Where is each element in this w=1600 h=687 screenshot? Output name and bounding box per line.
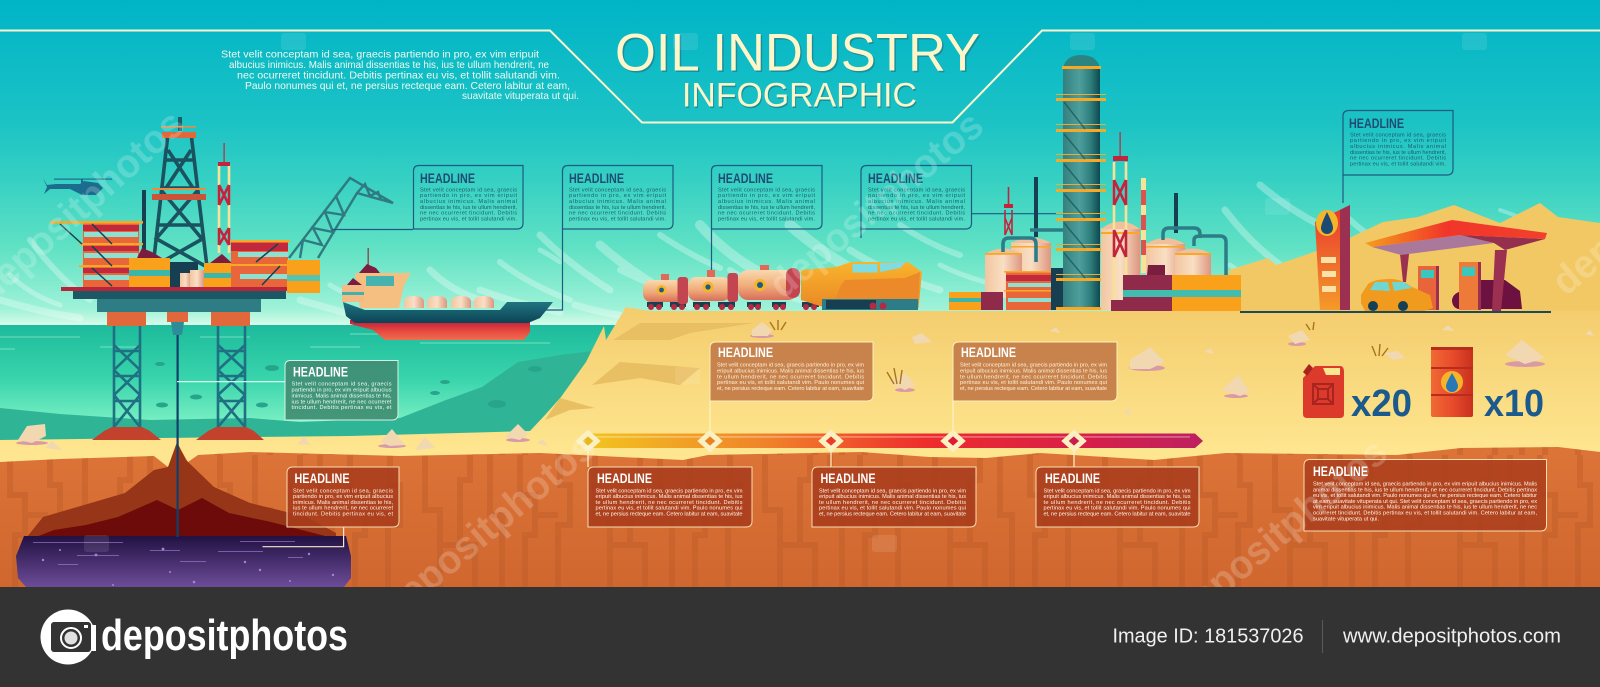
fuel pumps <box>1418 262 1481 310</box>
info box: reservoir: HEADLINE <box>294 470 350 486</box>
info box: rock 3: eripuit albucius inimicus. Malis animal dissentias te his, ius <box>1044 494 1191 500</box>
red mast <box>219 165 229 253</box>
info box: rock 2: et, ne persius recteque eam. Cetero labitur at eam, suavitate <box>819 512 966 518</box>
info box: station: dissentias te his, ius te ullum hendrerit, <box>1350 150 1446 156</box>
title: INFOGRAPHIC <box>683 78 918 116</box>
info box: water: Stet velit conceptam id sea, graecis <box>292 382 392 388</box>
brown dome <box>27 442 336 537</box>
intro text: suavitate vituperata ut qui. <box>462 90 579 102</box>
info box: reservoir <box>287 467 399 527</box>
connector: pipe to water box <box>177 381 285 383</box>
rock shadows <box>16 334 1545 448</box>
canopy top <box>1365 220 1547 247</box>
info box: sand 2: pertinax eu vis, et tollit salutandi vim. Paulo nonumes qui <box>960 380 1107 386</box>
info box: rock wide: animal dissentias te his, ius te ullum hendrerit, ne nec ocurreret tincidunt. Debitis pertinax <box>1313 487 1537 493</box>
sand land <box>0 307 1600 470</box>
orange car <box>1361 279 1433 311</box>
info box: water: partiendo in pro, ex vim eripuit albucius <box>292 388 392 394</box>
tall tank <box>1101 222 1140 310</box>
leg caps <box>107 312 250 326</box>
info box: station: albucius inimicus. Malis animal <box>1350 144 1446 150</box>
info box: top 4: dissentias te his, ius te ullum hendrerit, <box>868 205 965 211</box>
title <box>615 24 982 116</box>
info box: top 1: ne nec ocurreret tincidunt. Debitis <box>420 211 517 217</box>
info box: rock 1 <box>588 467 752 527</box>
info box: top 2: HEADLINE <box>569 170 624 186</box>
sky background <box>0 0 1600 326</box>
info box: reservoir: inimicus. Malis animal dissentias te his, <box>293 500 393 506</box>
info box: sand 1 <box>710 342 873 401</box>
info box: station: ne nec ocurreret tincidunt. Debitis <box>1350 156 1446 162</box>
info box: rock 2: te ullum hendrerit, ne nec ocurreret tincidunt. Debitis <box>819 500 966 506</box>
info box: rock 3: pertinax eu vis, et tollit salutandi vim. Paulo nonumes qui <box>1044 506 1190 512</box>
maroon car <box>1452 280 1522 309</box>
info box: rock wide: suavitate vituperata ut qui. <box>1313 516 1379 522</box>
info box: water <box>285 360 398 420</box>
info box: top 3: Stet velit conceptam id sea, graecis <box>718 187 815 193</box>
title frame <box>0 30 1600 122</box>
info box: top 1: albucius inimicus. Malis animal <box>420 199 517 205</box>
info box: top 3: ne nec ocurreret tincidunt. Debitis <box>718 211 815 217</box>
info box: top 2: partiendo in pro, ex vim eripuit <box>569 193 666 199</box>
milestone diamonds <box>579 433 1083 449</box>
info box: top 4: ne nec ocurreret tincidunt. Debitis <box>868 211 965 217</box>
info box: top 2 <box>562 166 673 229</box>
icon: oil barrel <box>1431 347 1473 417</box>
info box: reservoir: partiendo in pro, ex vim eripuit albucius <box>293 494 393 500</box>
info box: top 1: Stet velit conceptam id sea, graecis <box>420 187 517 193</box>
watermark overlays: depositphotos <box>373 425 604 629</box>
orange module 3 <box>287 260 320 293</box>
canopy underside <box>1372 235 1494 255</box>
wispy clouds <box>0 185 1530 318</box>
intro text: nec ocurreret tincidunt. Debitis pertinax eu vis, et tollit salutandi vim. <box>237 70 560 82</box>
info box: rock 1: et, ne persius recteque eam. Cetero labitur at eam, suavitate <box>596 512 742 518</box>
fish silhouettes <box>155 362 542 408</box>
info box: rock wide: ocurreret tincidunt. Debitis pertinax eu vis, et tollit salutandi vim. Cetero labitur at eam, <box>1313 511 1537 517</box>
superstructure <box>368 248 369 273</box>
intro text: Stet velit conceptam id sea, graecis partiendo in pro, ex vim eripuit <box>221 48 539 60</box>
depositphotos logo: depositphotos <box>101 611 348 660</box>
info box: rock wide: at eam, suavitate vituperata ut qui. Stet velit conceptam id sea, graecis partiendo in pro, ex <box>1313 499 1537 505</box>
tank car 3 <box>738 265 800 300</box>
info box: sand 2: eripuit albucius inimicus. Malis animal dissentias te his, ius <box>960 368 1107 374</box>
info box: rock 1: eripuit albucius inimicus. Malis animal dissentias te his, ius <box>596 494 743 500</box>
sea <box>0 325 620 450</box>
left mast <box>1005 187 1012 235</box>
footer bar <box>0 587 1600 687</box>
info box: rock wide: Stet velit conceptam id sea, graecis partiendo in pro, ex vim eripuit albucius inimicus. Malis <box>1313 481 1537 487</box>
ground line <box>1240 311 1551 313</box>
info box: rock 2: eripuit albucius inimicus. Malis animal dissentias te his, ius <box>819 494 966 500</box>
info box: sand 1: Stet velit conceptam id sea, graecis partiendo in pro, ex vim <box>717 363 864 369</box>
info box: rock 3: HEADLINE <box>1045 470 1100 486</box>
info box: top 4: albucius inimicus. Malis animal <box>868 199 965 205</box>
right tanks <box>1146 238 1211 275</box>
drill pipe <box>176 325 179 537</box>
intro text: Paulo nonumes qui et, ne persius recteque eam. Cetero labitur at eam, <box>245 80 570 92</box>
label: x10: x10 <box>1484 383 1544 425</box>
leg bases <box>92 427 161 440</box>
watermark overlays: depositphotos <box>761 103 992 307</box>
info box: top 2: albucius inimicus. Malis animal <box>569 199 666 205</box>
info box: water: ius te ullum hendrerit, ne nec ocurreret <box>292 399 392 405</box>
info box: rock 1: Stet velit conceptam id sea, graecis partiendo in pro, ex vim <box>596 488 743 494</box>
info box: rock wide: eu vis, et tollit salutandi vim. Paulo nonumes qui et, ne persius recteque eam. Cetero labitur <box>1313 493 1537 499</box>
info box: rock 3 <box>1036 467 1199 527</box>
title: OIL INDUSTRY <box>615 24 980 82</box>
connector lines top <box>332 175 1343 310</box>
info box: rock 1: HEADLINE <box>597 470 652 486</box>
depositphotos logo <box>40 610 348 664</box>
icon: jerrycan <box>1303 364 1344 418</box>
chimney <box>142 190 146 260</box>
info box: top 1: partiendo in pro, ex vim eripuit <box>420 193 517 199</box>
canopy posts <box>1400 250 1507 311</box>
price pylon <box>1315 205 1350 310</box>
info box: top 3: dissentias te his, ius te ullum hendrerit, <box>718 205 815 211</box>
watermark camera marks <box>84 33 1487 552</box>
right pipes <box>1163 228 1226 275</box>
right mast <box>1114 162 1126 300</box>
info box: station: Stet velit conceptam id sea, graecis <box>1350 132 1446 138</box>
intro text: albucius inimicus. Malis animal dissentias te his, ius te ullum hendrerit, ne <box>229 59 549 71</box>
info box: station: HEADLINE <box>1349 115 1404 131</box>
orange plant <box>1111 265 1241 311</box>
timeline bar <box>588 434 1203 448</box>
info box: sand 2: Stet velit conceptam id sea, graecis partiendo in pro, ex vim <box>960 363 1107 369</box>
offshore oil platform <box>43 117 393 440</box>
info box: sand 2: te ullum hendrerit, ne nec ocurreret tincidunt. Debitis <box>960 374 1107 380</box>
info box: top 2: Stet velit conceptam id sea, graecis <box>569 187 666 193</box>
left pipes <box>1003 230 1063 262</box>
watermark overlays: depositphotos <box>1165 430 1396 634</box>
info box: top 3: partiendo in pro, ex vim eripuit <box>718 193 815 199</box>
bogies and wheels <box>647 302 819 307</box>
refinery <box>949 55 1241 311</box>
right building <box>230 240 290 287</box>
info box: rock wide: vim eripuit albucius inimicus. Malis animal dissentias te his, ius te ullum hendrerit, ne nec <box>1313 505 1537 511</box>
storage tanks <box>180 270 204 287</box>
info box: top 4: Stet velit conceptam id sea, graecis <box>868 187 965 193</box>
info box: rock 2: Stet velit conceptam id sea, graecis partiendo in pro, ex vim <box>819 488 966 494</box>
title: OIL INDUSTRY <box>616 25 982 84</box>
info box: rock 2 <box>812 467 976 527</box>
orange module 2 <box>204 254 238 287</box>
info box: rock 3: et, ne persius recteque eam. Cetero labitur at eam, suavitate <box>1044 512 1190 518</box>
info box: sand 1: te ullum hendrerit, ne nec ocurreret tincidunt. Debitis <box>717 374 864 380</box>
info box: reservoir: ius te ullum hendrerit, ne nec ocurreret <box>293 506 393 512</box>
underwater hills <box>0 350 600 445</box>
info box: sand 2 <box>953 342 1117 401</box>
info box: rock wide <box>1304 460 1546 531</box>
left chimney <box>1034 177 1038 237</box>
info box: sand 1: HEADLINE <box>718 344 773 360</box>
info box: top 2: pertinax eu vis, et tollit salutandi vim. <box>569 216 666 222</box>
website: www.depositphotos.com <box>1342 625 1561 648</box>
info box: sand 1: et, ne persius recteque eam. Cetero labitur at eam, suavitate <box>717 386 864 392</box>
tank train <box>643 262 922 310</box>
info box: top 3: pertinax eu vis, et tollit salutandi vim. <box>718 216 815 222</box>
info box: sand 2: HEADLINE <box>961 344 1016 360</box>
gas station <box>1240 205 1551 313</box>
watermark overlays <box>0 116 1600 587</box>
label: x20: x20 <box>1351 383 1412 425</box>
connectors <box>588 400 1074 467</box>
info box: top 4: pertinax eu vis, et tollit salutandi vim. <box>868 216 965 222</box>
info box: top 2: dissentias te his, ius te ullum hendrerit, <box>569 205 666 211</box>
cliff shading <box>545 323 754 420</box>
info box: top 1 <box>414 166 523 229</box>
info box: rock 2: pertinax eu vis, et tollit salutandi vim. Paulo nonumes qui <box>819 506 966 512</box>
info box: top 2: ne nec ocurreret tincidunt. Debitis <box>569 211 666 217</box>
desert rocks <box>16 320 1594 450</box>
info box: water: tincidunt. Debitis pertinax eu vis, et <box>292 405 392 411</box>
helicopter <box>43 178 112 195</box>
info box: top 4: partiendo in pro, ex vim eripuit <box>868 193 965 199</box>
info box: top 1: HEADLINE <box>420 170 475 186</box>
background desert hills <box>1229 203 1600 311</box>
deck <box>97 299 261 312</box>
info box: rock 2: HEADLINE <box>820 470 876 486</box>
left tanks <box>985 238 1051 298</box>
rock layer <box>0 445 1600 587</box>
footer divider <box>1322 620 1323 653</box>
left red plant <box>1004 268 1063 310</box>
info box: top 1: pertinax eu vis, et tollit salutandi vim. <box>420 216 517 222</box>
info box: sand 1: pertinax eu vis, et tollit salutandi vim. Paulo nonumes qui <box>717 380 864 386</box>
support legs <box>113 325 246 427</box>
info box: rock 1: pertinax eu vis, et tollit salutandi vim. Paulo nonumes qui <box>596 506 742 512</box>
oil pool <box>16 536 351 587</box>
info box: reservoir: tincidunt. Debitis pertinax eu vis, et <box>293 512 393 518</box>
info box: rock 3: Stet velit conceptam id sea, graecis partiendo in pro, ex vim <box>1044 488 1191 494</box>
dark red dome <box>36 498 329 537</box>
connector: reservoir to rock box <box>262 527 344 547</box>
desert shrubs <box>770 320 1388 384</box>
locomotive <box>801 262 922 310</box>
info box: top 4 <box>861 166 972 229</box>
left building <box>50 221 143 287</box>
deck tanks <box>404 296 494 308</box>
title: INFOGRAPHIC <box>682 76 917 114</box>
info box: station: partiendo in pro, ex vim eripuit <box>1350 138 1446 144</box>
main column <box>1056 55 1106 310</box>
crane <box>289 178 393 258</box>
image id: Image ID: 181537026 <box>1112 625 1304 648</box>
info box: rock 1: te ullum hendrerit, ne nec ocurreret tincidunt. Debitis <box>596 500 743 506</box>
orange module 1 <box>129 258 170 287</box>
info box: top 3 <box>712 166 822 229</box>
info box: reservoir: Stet velit conceptam id sea, graecis <box>293 488 393 494</box>
info box: top 3: HEADLINE <box>718 170 773 186</box>
info box: top 1: dissentias te his, ius te ullum hendrerit, <box>420 205 517 211</box>
info box: top 4: HEADLINE <box>868 170 923 186</box>
info box: rock 3: te ullum hendrerit, ne nec ocurreret tincidunt. Debitis <box>1044 500 1191 506</box>
timeline <box>579 400 1203 467</box>
info box: rock wide: HEADLINE <box>1313 463 1368 479</box>
info box: sand 2: et, ne persius recteque eam. Cetero labitur at eam, suavitate <box>960 386 1107 392</box>
info box: water: HEADLINE <box>293 364 348 380</box>
info box: top 3: albucius inimicus. Malis animal <box>718 199 815 205</box>
tank car 2 <box>688 270 738 302</box>
oil specks <box>33 541 334 586</box>
striped chimney <box>1141 178 1146 273</box>
keel <box>350 320 530 340</box>
icon: camera <box>40 610 96 664</box>
derrick <box>153 133 207 267</box>
info box: station: pertinax eu vis, et tollit salutandi vim. <box>1350 162 1446 168</box>
info box: water: inimicus. Malis animal dissentias te his, <box>292 393 392 399</box>
hull <box>343 302 553 323</box>
tanker ship <box>342 248 553 340</box>
info box: sand 1: eripuit albucius inimicus. Malis animal dissentias te his, ius <box>717 368 864 374</box>
small orange module <box>949 292 1003 310</box>
water highlights <box>0 334 550 349</box>
oil reservoir <box>16 442 351 587</box>
info box: station <box>1343 110 1453 175</box>
dark chimney <box>1174 193 1178 233</box>
tank car 1 <box>643 274 688 304</box>
intro text <box>221 48 579 102</box>
